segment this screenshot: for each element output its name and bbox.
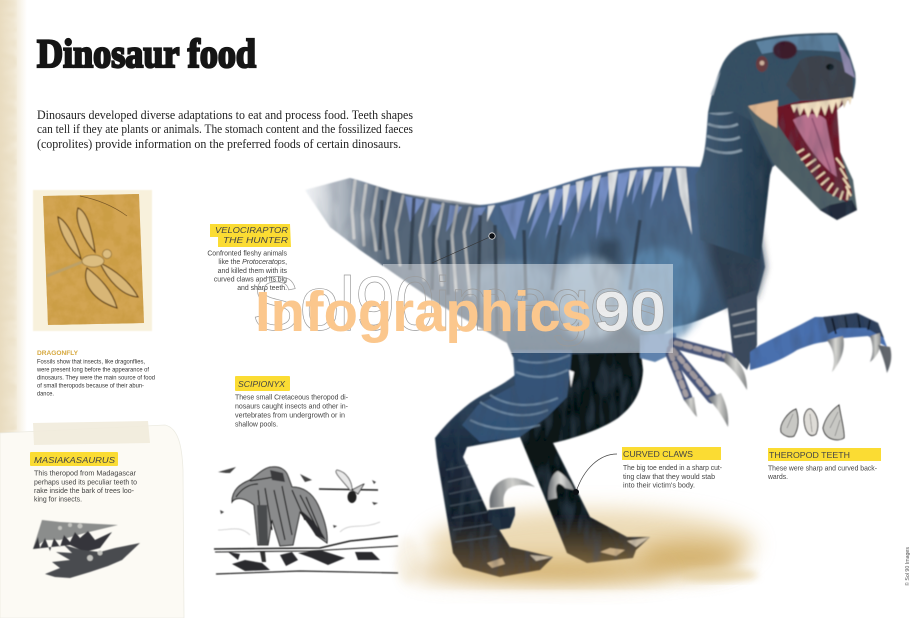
- text: scipionyx: shallow pools.: [235, 422, 278, 428]
- dark tail stripes: [380, 198, 640, 335]
- tail grey wash: [342, 178, 507, 342]
- label: theropod teeth: THEROPOD TEETH: [769, 450, 850, 460]
- text: theropod teeth: [767, 466, 878, 481]
- dragonfly caption: of small theropods because of their abun-: [37, 382, 144, 390]
- leader line: curved claws: [573, 454, 617, 495]
- label: curved claws: [622, 447, 721, 460]
- lower teeth: [797, 149, 851, 200]
- label: curved claws: CURVED CLAWS: [623, 449, 693, 459]
- copyright: © Sol 90 Images: [904, 547, 911, 586]
- near leg: [435, 350, 572, 577]
- icon: masiakasaurus jaw sketch: [33, 520, 140, 578]
- raised toe and sickle claw: [488, 478, 535, 530]
- right arm claws: [827, 336, 844, 372]
- far leg sickle claw: [548, 471, 574, 500]
- text: masiakasaurus: This theropod from Madagascar: [34, 470, 137, 478]
- label: scipionyx: SCIPIONYX: [238, 379, 285, 389]
- eye patch: [773, 41, 797, 59]
- panel: taped paper card: [0, 421, 184, 618]
- label: masiakasaurus: [30, 452, 118, 466]
- body and tail: [305, 163, 765, 357]
- icon: scipionyx sketch scene: [214, 467, 398, 574]
- text: velociraptor: like the Protoceratops,: [218, 259, 287, 266]
- dust cloud: [370, 509, 758, 600]
- neck stripes: [706, 68, 742, 153]
- text: scipionyx: [235, 394, 349, 428]
- aged paper strip: [0, 0, 420, 618]
- white stripes: [487, 168, 692, 235]
- text: velociraptor: [207, 250, 288, 292]
- label: theropod teeth: [768, 448, 881, 461]
- label: scipionyx: [235, 376, 290, 391]
- blue stripes: [405, 170, 664, 240]
- far leg: [520, 340, 650, 563]
- title: Dinosaur food: [37, 31, 256, 76]
- watermark: Sol90images: [252, 262, 665, 347]
- text: velociraptor: Confronted fleshy animals: [207, 250, 288, 258]
- claws at toes: [530, 555, 553, 561]
- text: masiakasaurus: rake inside the bark of trees loo-: [34, 488, 135, 495]
- label: velociraptor the hunter: THE HUNTER: [223, 235, 288, 245]
- text: theropod teeth: wards.: [767, 474, 788, 481]
- small insects: [218, 467, 378, 528]
- intro text: Dinosaurs developed diverse adaptations to eat and process food. Teeth shapes: [37, 108, 413, 122]
- body shading: [595, 236, 628, 336]
- text: curved claws: The big toe ended in a sharp cut-: [623, 465, 723, 472]
- grey tail stripes: [352, 181, 470, 295]
- right arm: [727, 290, 891, 373]
- label: masiakasaurus: MASIAKASAURUS: [34, 455, 115, 465]
- label: velociraptor the hunter: VELOCIRAPTOR: [215, 225, 288, 235]
- mouth interior: [777, 98, 852, 202]
- text: scipionyx: These small Cretaceous theropod di-: [235, 394, 349, 402]
- eye: [756, 56, 768, 72]
- ground lines: [214, 536, 398, 574]
- text: masiakasaurus: [34, 470, 137, 504]
- tongue: [793, 114, 837, 177]
- intro text: [37, 108, 413, 151]
- velociraptor illustration: [305, 33, 891, 577]
- text: velociraptor: and sharp teeth.: [237, 285, 287, 292]
- scipionyx dinosaur group: [232, 467, 327, 546]
- icon: dragonfly imprint: [47, 208, 138, 308]
- cheek: [748, 100, 778, 128]
- left arm: [640, 333, 747, 427]
- text: masiakasaurus: king for insects.: [34, 496, 82, 504]
- lower jaw: [747, 107, 857, 220]
- leader line: velociraptor: [432, 233, 495, 263]
- text: curved claws: ting claw that they would stab: [623, 474, 715, 481]
- intro text: can tell if they ate plants or animals. The stomach content and the fossilized faeces: [37, 122, 413, 136]
- text: theropod teeth: These were sharp and curved back-: [768, 466, 878, 472]
- text: masiakasaurus: perhaps used its peculiar teeth to: [34, 480, 137, 486]
- text: velociraptor: and killed them with its: [218, 268, 288, 275]
- dragonfly caption: [36, 350, 155, 398]
- dragonfly caption: dance.: [37, 390, 54, 398]
- neck: [695, 40, 790, 260]
- large dragonfly: [319, 470, 378, 502]
- left arm claws: [724, 352, 747, 390]
- watermark: Infographics: [255, 280, 592, 344]
- intro text: (coprolites) provide information on the preferred foods of certain dinosaurs.: [37, 137, 401, 151]
- nostril: [826, 64, 834, 70]
- shin scales: [446, 465, 497, 542]
- dragonfly caption: Fossils show that insects, like dragonflies,: [37, 358, 145, 366]
- faint background outline: [218, 522, 380, 535]
- dragonfly caption: DRAGONFLY: [37, 350, 78, 357]
- text: scipionyx: vertebrates from undergrowth or in: [235, 412, 345, 420]
- panel: dragonfly fossil: [33, 190, 152, 331]
- label: velociraptor the hunter: [210, 224, 291, 247]
- watermark: 90: [594, 280, 666, 344]
- head: [708, 33, 857, 220]
- text: curved claws: into their victim's body.: [623, 482, 695, 490]
- icon: theropod teeth: [781, 405, 844, 440]
- text: curved claws: [623, 465, 723, 490]
- dragonfly caption: dinosaurs. They were the main source of food: [37, 374, 155, 382]
- upper teeth: [791, 97, 852, 118]
- lower animals: [228, 550, 380, 571]
- text: scipionyx: nosaurs caught insects and other in-: [235, 404, 349, 410]
- tape: [33, 421, 150, 445]
- text: velociraptor: curved claws and its big: [214, 276, 287, 284]
- toe highlights: [487, 548, 625, 568]
- dragonfly caption: were present long before the appearance of: [36, 366, 149, 374]
